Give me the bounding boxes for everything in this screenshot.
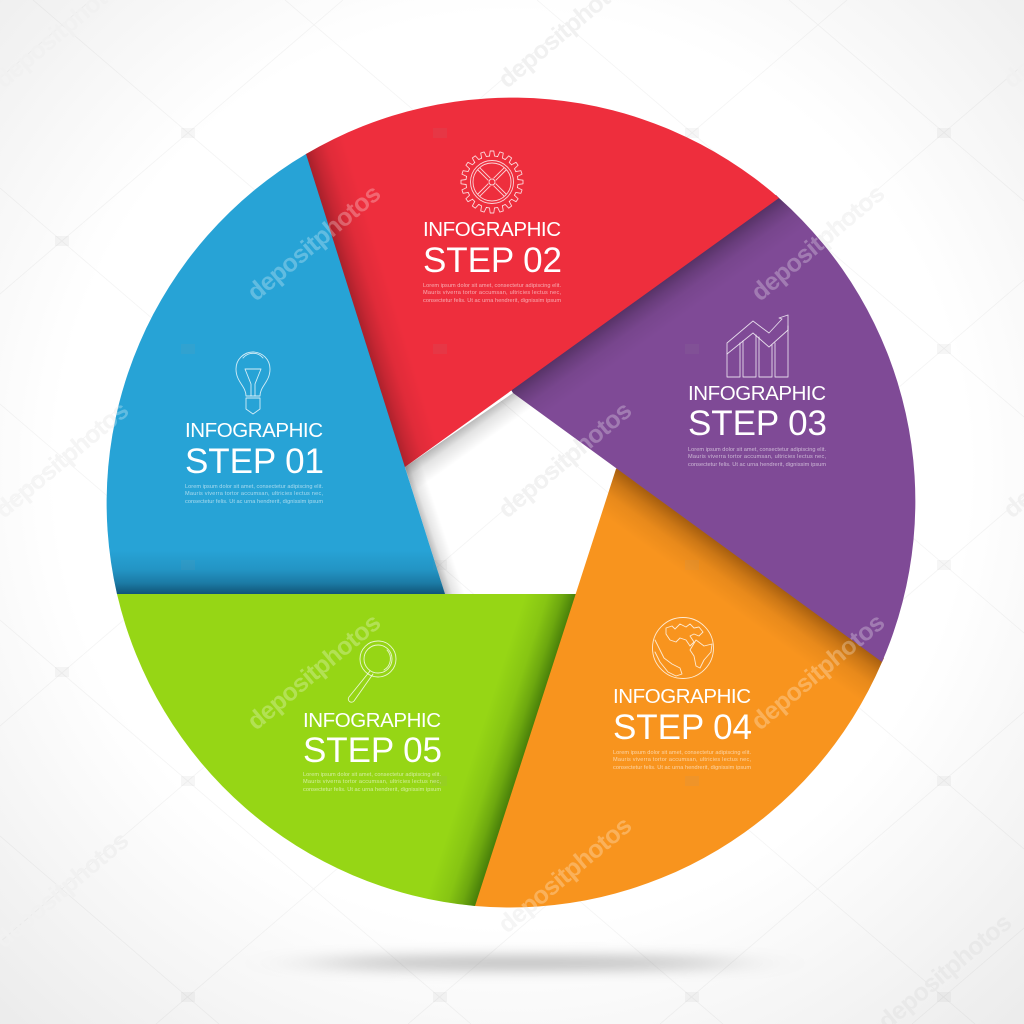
heading: step 01: Lorem ipsum dolor sit amet, consectetur adipiscing elit. [185,484,323,490]
watermark text on panels: depositphotos [746,179,890,307]
heading: step 03: INFOGRAPHIC [688,382,826,405]
heading: step 03: STEP 03 [688,404,827,443]
center pentagon shadows [405,393,616,594]
heading: step 01 [185,419,324,505]
watermark text on background: depositphotos [746,179,890,307]
heading: step 04: Mauris viverra tortor accumsan, ultricies lectus nec, [613,757,751,763]
watermark text on panels [0,179,890,939]
heading: step 05: Mauris viverra tortor accumsan, ultricies lectus nec, [303,779,441,785]
heading: step 02 [423,218,562,304]
heading: step 01: STEP 01 [185,442,324,481]
icon: gear [461,151,523,213]
heading: step 04: STEP 04 [613,708,752,747]
heading: step 01: consectetur felis. Ut ac urna hendrerit, dignissim ipsum [185,499,323,505]
heading: step 04: Lorem ipsum dolor sit amet, consectetur adipiscing elit. [613,750,751,756]
heading: step 03: consectetur felis. Ut ac urna hendrerit, dignissim ipsum [688,462,826,468]
panel: step 04 orange [475,465,884,907]
heading: step 03: Lorem ipsum dolor sit amet, consectetur adipiscing elit. [688,447,826,453]
icon: globe [652,618,714,678]
icon: light bulb [236,352,270,414]
heading: step 02: consectetur felis. Ut ac urna hendrerit, dignissim ipsum [423,298,561,304]
icon: magnifier [348,641,396,702]
watermark text on panels: depositphotos [746,608,890,736]
heading: step 04: INFOGRAPHIC [613,685,751,708]
heading: step 05: INFOGRAPHIC [303,709,441,732]
icon: bar chart [727,315,788,377]
watermark text on background: depositphotos [493,811,637,939]
watermark camera marks [55,128,951,1002]
watermark text on panels: depositphotos [242,608,386,736]
panel: step 03 purple [510,195,915,662]
watermark text on panels: depositphotos [242,179,386,307]
ground shadow [310,957,740,969]
heading: step 05 [303,709,442,793]
heading: step 02: Mauris viverra tortor accumsan, ultricies lectus nec, [423,290,561,296]
heading: step 02: INFOGRAPHIC [423,218,561,241]
panel: step 01 blue [107,154,445,594]
heading: step 01: Mauris viverra tortor accumsan, ultricies lectus nec, [185,491,323,497]
heading: step 05: Lorem ipsum dolor sit amet, consectetur adipiscing elit. [303,772,441,778]
panel: step 05 green [117,594,579,906]
watermark text on background: depositphotos [493,396,637,524]
heading: step 03: Mauris viverra tortor accumsan, ultricies lectus nec, [688,454,826,460]
heading: step 02: Lorem ipsum dolor sit amet, consectetur adipiscing elit. [423,283,561,289]
panel: step 02 red [303,98,779,468]
heading: step 04: consectetur felis. Ut ac urna hendrerit, dignissim ipsum [613,765,751,771]
heading: step 01: INFOGRAPHIC [185,419,323,442]
heading: step 03 [688,382,827,468]
watermark text on panels: depositphotos [493,396,637,524]
heading: step 04 [613,685,752,771]
watermark text on panels: depositphotos [493,811,637,939]
heading: step 02: STEP 02 [423,241,562,280]
heading: step 05: STEP 05 [303,731,442,770]
heading: step 05: consectetur felis. Ut ac urna hendrerit, dignissim ipsum [303,787,441,793]
